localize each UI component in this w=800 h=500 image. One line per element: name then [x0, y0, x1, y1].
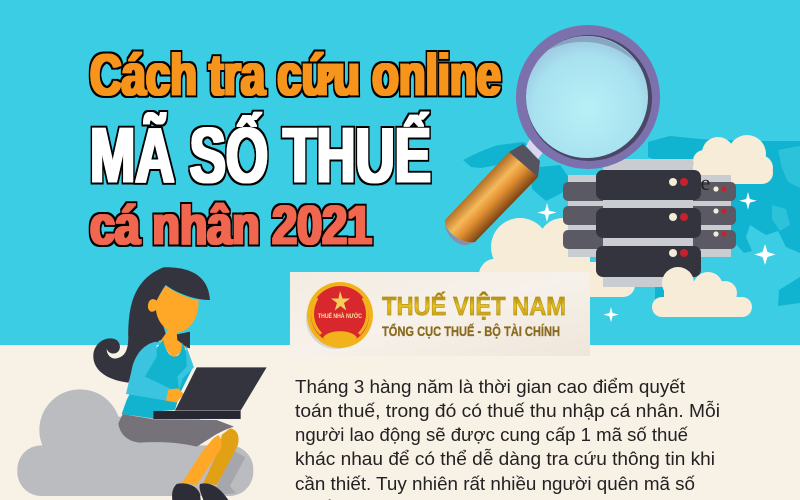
magnifier handle [445, 151, 538, 242]
stray letter e: e [700, 170, 710, 195]
leg back [203, 428, 239, 485]
emblem: THUẾ NHÀ NƯỚC [318, 310, 362, 320]
panel: cyan sky background [0, 0, 800, 345]
shoes [172, 483, 228, 500]
title line 1: Cách tra cứu online [90, 43, 501, 108]
title line 2: MÃ SỐ THUẾ [90, 111, 431, 199]
magnifier lens [526, 36, 648, 158]
gray cloud [17, 389, 253, 496]
laptop base [153, 411, 241, 419]
icon: magnifying glass [445, 25, 660, 245]
title line 3: cá nhân 2021 [90, 194, 372, 256]
body text: cần thiết. Tuy nhiên rất nhiều người quên mã số [295, 473, 695, 494]
sparkles [538, 192, 776, 322]
illustration: woman with laptop on cloud [17, 267, 267, 500]
magnifier rim [516, 25, 660, 169]
skirt [118, 414, 234, 447]
body text: khác nhau để có thể dễ dàng tra cứu thông tin khi [295, 448, 715, 469]
title [90, 43, 501, 256]
cloud: lower right cloud [652, 267, 752, 317]
hair [93, 267, 210, 383]
panel: cream lower background [0, 345, 800, 500]
body text: Tháng 3 hàng năm là thời gian cao điểm quyết [295, 376, 685, 397]
world map silhouette [463, 136, 800, 307]
brand subtitle: TỔNG CỤC THUẾ - BỘ TÀI CHÍNH [382, 324, 560, 339]
face and neck [148, 286, 198, 358]
laptop screen [175, 367, 267, 411]
sleeve [126, 342, 170, 401]
body text: người lao động sẽ được cung cấp 1 mã số thuế [295, 424, 689, 445]
cloud: large cloud behind logo [479, 218, 635, 297]
leg front [182, 435, 222, 485]
brand name: THUẾ VIỆT NAM [382, 291, 566, 321]
hand [166, 388, 184, 403]
body text: toán thuế, trong đó có thuế thu nhập cá nhân. Mỗi [295, 400, 720, 421]
torso [122, 340, 193, 418]
body text [295, 376, 720, 500]
emblem [306, 282, 373, 349]
icon: server stack [563, 159, 736, 287]
cloud: upper right cloud [689, 135, 773, 184]
logo banner [290, 272, 590, 356]
